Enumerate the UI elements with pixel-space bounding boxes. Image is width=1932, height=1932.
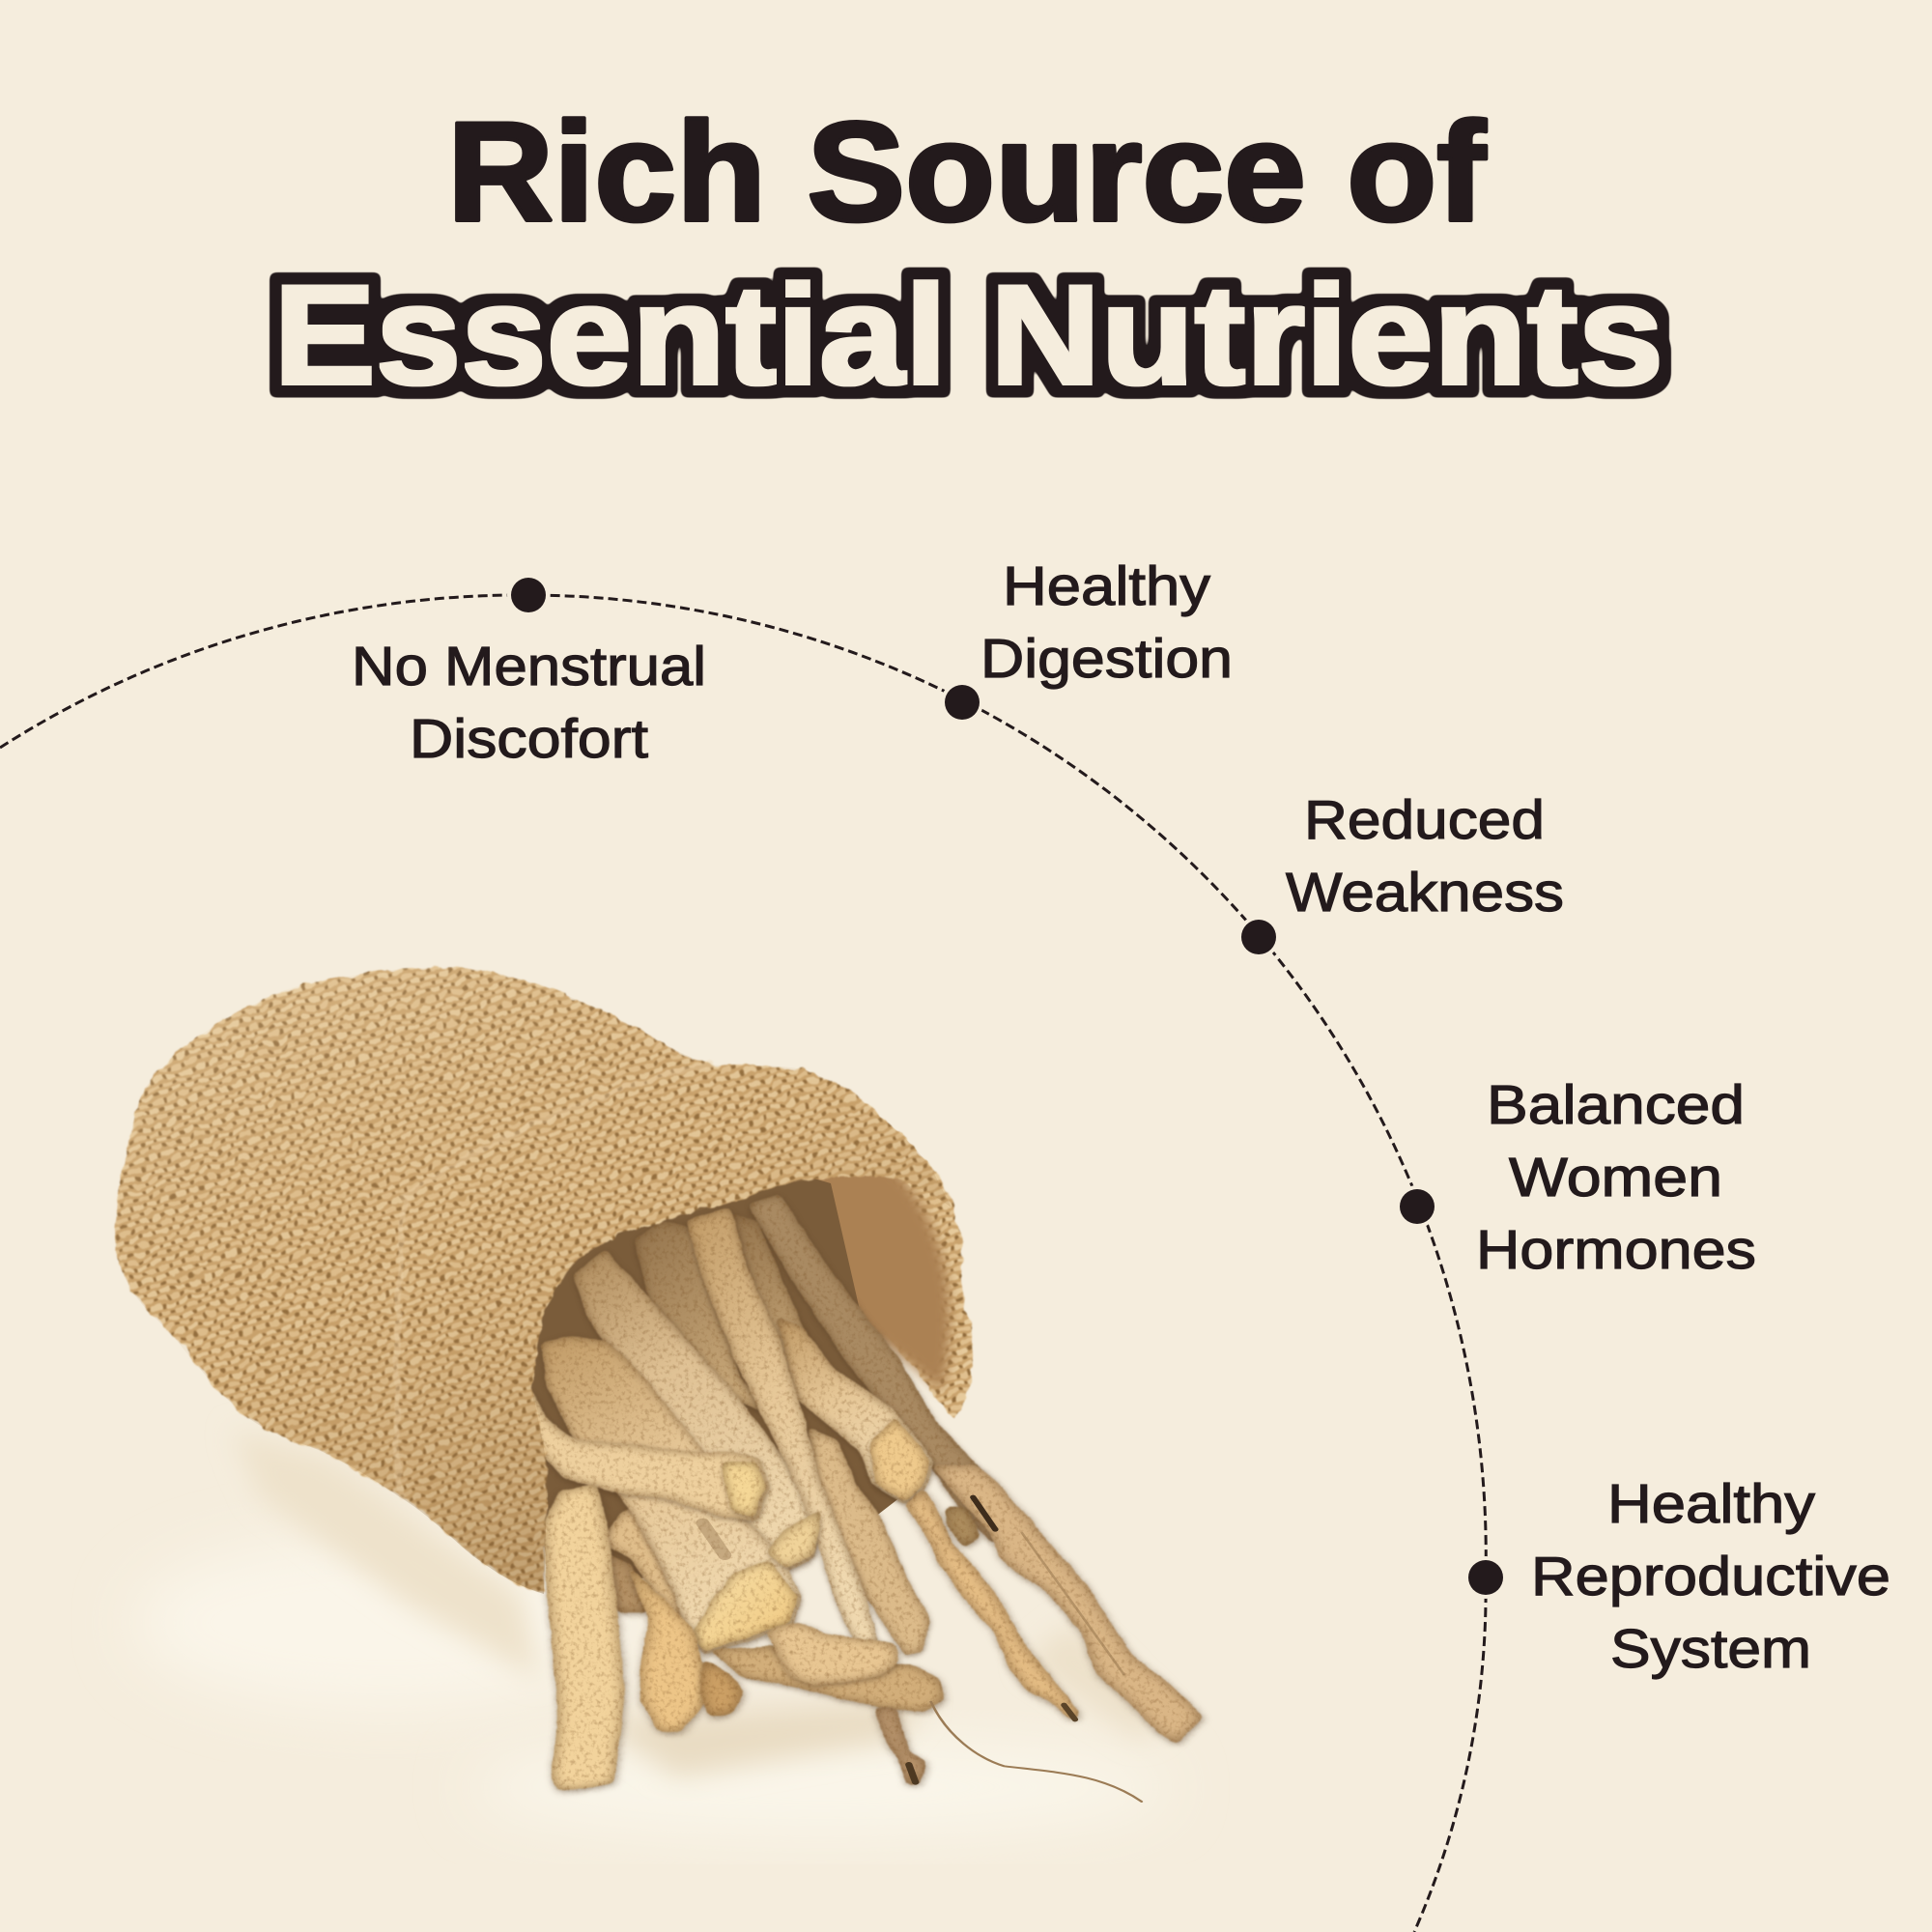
title line 2 outlined: Essential Nutrients <box>273 256 1663 413</box>
label: healthy reproductive system <box>1531 1473 1890 1680</box>
thin root hair <box>931 1702 1142 1802</box>
marker: no menstrual discomfort <box>507 574 550 616</box>
marker: reduced weakness <box>1237 916 1280 958</box>
burlap tail behind lower roots <box>596 1548 649 1613</box>
thick back root cut end <box>766 1510 821 1568</box>
label: healthy reproductive system: Reproductive <box>1531 1546 1890 1607</box>
dashed arc <box>0 595 1486 1932</box>
long gnarled root <box>931 1465 1204 1746</box>
roots inside the sack <box>528 1195 1204 1792</box>
label: reduced weakness: Weakness <box>1286 862 1564 923</box>
label: no menstrual discofort: Discofort <box>410 708 648 770</box>
long lower left root <box>543 1485 625 1792</box>
lower right root <box>809 1427 930 1655</box>
short dark lower root <box>700 1659 745 1717</box>
label: healthy reproductive system: Healthy <box>1607 1473 1816 1535</box>
label: healthy digestion: Digestion <box>980 628 1233 690</box>
thin back root <box>731 1214 828 1404</box>
label: balanced women hormones: Hormones <box>1476 1219 1756 1281</box>
curved front root <box>528 1384 770 1520</box>
title line 1: Rich Source of <box>447 93 1486 250</box>
label: balanced women hormones <box>1476 1074 1756 1281</box>
dark far root <box>747 1195 995 1546</box>
floor reflection and shadow <box>135 1430 1169 1835</box>
back thick root <box>573 1249 824 1572</box>
long thin root <box>686 1208 879 1649</box>
bulbous right root <box>776 1317 934 1504</box>
dark tips and blemishes <box>702 1497 1123 1782</box>
wavy root <box>904 1488 1080 1722</box>
label: healthy digestion: Healthy <box>1003 555 1211 617</box>
label: no menstrual discofort: No Menstrual <box>352 636 706 697</box>
curved root cut end <box>722 1462 766 1517</box>
label: healthy digestion <box>980 555 1233 690</box>
label: balanced women hormones: Women <box>1509 1147 1722 1208</box>
label: healthy reproductive system: System <box>1610 1618 1811 1680</box>
bulbous root cut end <box>869 1417 930 1500</box>
sack back wall and far rim <box>526 1099 973 1594</box>
sack front body <box>115 968 952 1594</box>
photo: burlap sack with roots <box>115 968 1204 1835</box>
label: no menstrual discofort <box>352 636 706 770</box>
top centre root <box>635 1220 766 1413</box>
marker: balanced hormones <box>1396 1185 1438 1228</box>
crossing root <box>709 1645 945 1713</box>
small pointed root <box>873 1707 926 1785</box>
label: balanced women hormones: Balanced <box>1487 1074 1745 1136</box>
front thick root <box>541 1336 802 1655</box>
label: reduced weakness: Reduced <box>1304 789 1545 851</box>
sack fold seam <box>397 1065 710 1497</box>
marker: reproductive system <box>1464 1556 1507 1599</box>
marker: healthy digestion <box>941 681 983 724</box>
front root cut end <box>693 1560 799 1652</box>
small knob <box>945 1507 980 1548</box>
middle lower root <box>625 1562 707 1732</box>
hooked root <box>767 1621 897 1686</box>
root behind front root <box>599 1507 693 1635</box>
label: reduced weakness <box>1286 789 1564 923</box>
